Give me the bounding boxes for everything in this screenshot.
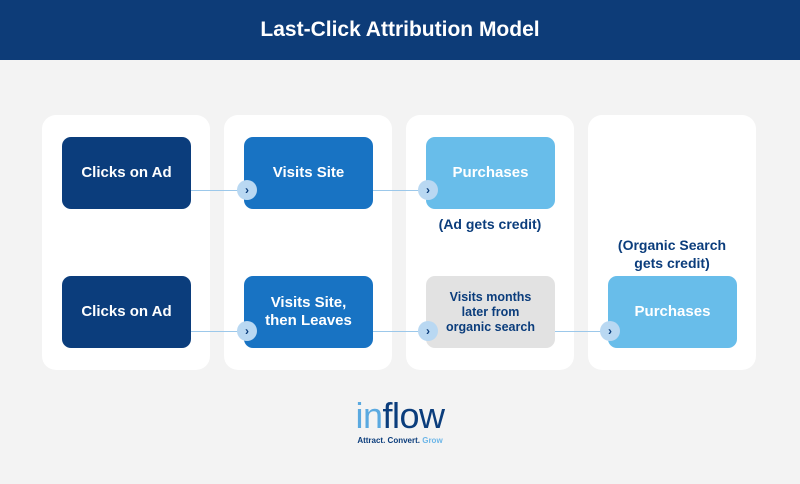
box: visits site then leaves: Visits Site,: [271, 294, 346, 311]
note: ad gets credit: (Ad gets credit): [439, 216, 541, 232]
box: clicks on ad row 1: Clicks on Ad: [81, 164, 172, 181]
text: ›: [245, 183, 249, 197]
text: ›: [245, 324, 249, 338]
box: clicks on ad row 1: [62, 137, 191, 209]
arrow icons: [237, 180, 620, 341]
box: purchases row 2: [608, 276, 737, 348]
title: [0, 0, 800, 60]
box: visits months later: [426, 276, 555, 348]
panel: step 1: [42, 115, 210, 370]
note: organic search gets credit: gets credit): [634, 255, 710, 271]
box: visits months later: Visits months: [450, 290, 531, 304]
panel: step 3: [406, 115, 574, 370]
box: visits months later: organic search: [446, 320, 535, 334]
logo: inflow: Attract. Convert. Grow: [357, 436, 443, 445]
panel: step 2: [224, 115, 392, 370]
logo: inflow: inflow: [355, 395, 445, 436]
note: organic search gets credit: [618, 237, 726, 271]
box: visits site then leaves: [244, 276, 373, 348]
box: visits months later: later from: [462, 304, 519, 318]
connector lines: [191, 190, 600, 332]
box: visits site: [244, 137, 373, 209]
text: ›: [426, 324, 430, 338]
box: clicks on ad row 2: Clicks on Ad: [81, 303, 172, 320]
box: visits site: Visits Site: [273, 164, 344, 181]
box: purchases row 2: Purchases: [635, 303, 710, 320]
note: organic search gets credit: (Organic Search: [618, 237, 726, 253]
panel: step 4: [588, 115, 756, 370]
text: ›: [426, 183, 430, 197]
title: Last-Click Attribution Model: [260, 18, 540, 41]
box: purchases row 1: Purchases: [453, 164, 528, 181]
text: ›: [608, 324, 612, 338]
box: purchases row 1: [426, 137, 555, 209]
box: visits site then leaves: then Leaves: [265, 312, 352, 329]
box: clicks on ad row 2: [62, 276, 191, 348]
